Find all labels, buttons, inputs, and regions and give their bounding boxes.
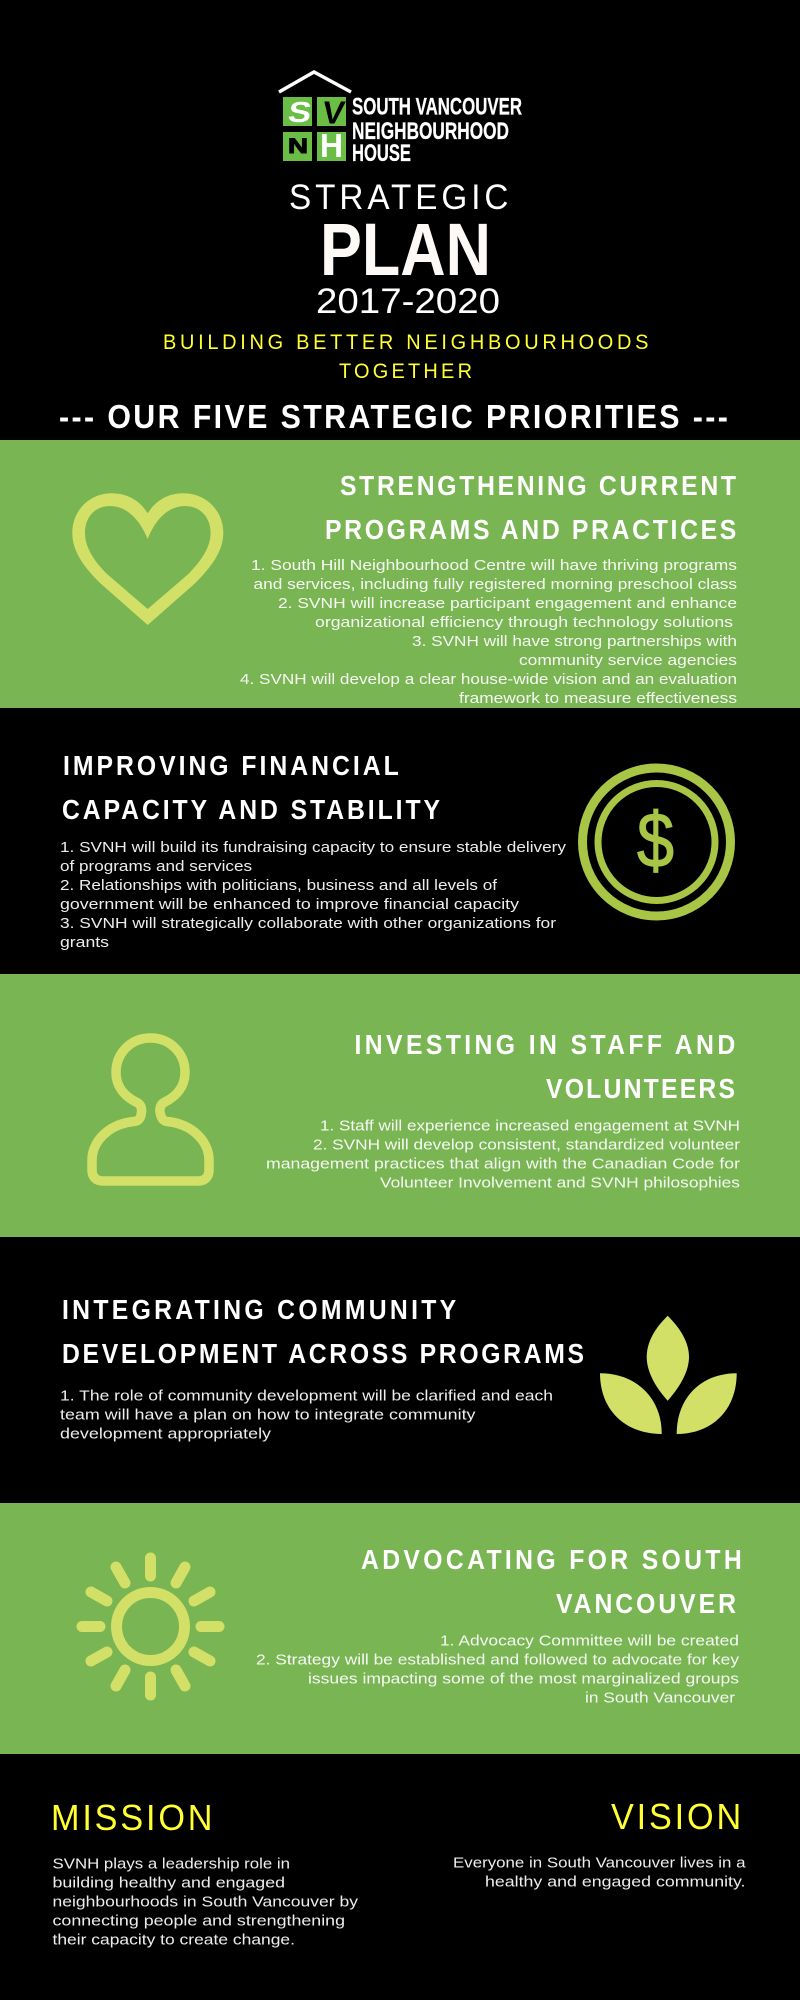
logo: South Vancouver Neighbourhood House: H — [320, 127, 343, 164]
header — [59, 72, 728, 435]
body text: of programs and services — [60, 858, 252, 875]
icon: person — [92, 1038, 209, 1181]
body text: 1. Advocacy Committee will be created — [440, 1633, 739, 1650]
heading: VOLUNTEERS — [546, 1073, 735, 1104]
body text — [60, 1388, 553, 1443]
heading — [62, 750, 441, 825]
section heading: five strategic priorities: --- OUR FIVE STRATEGIC PRIORITIES --- — [59, 398, 728, 435]
panel: vision — [453, 1797, 746, 1891]
icon: leaves — [600, 1316, 737, 1434]
body text: Volunteer Involvement and SVNH philosophies — [380, 1175, 740, 1192]
body text: government will be enhanced to improve financial capacity — [60, 896, 520, 913]
logo: South Vancouver Neighbourhood House: NEIGHBOURHOOD — [352, 118, 509, 145]
logo: South Vancouver Neighbourhood House — [279, 72, 522, 167]
heading: vision: VISION — [611, 1797, 741, 1837]
body text: vision: healthy and engaged community. — [485, 1874, 746, 1891]
panel: improving financial capacity — [0, 708, 800, 974]
body text: organizational efficiency through technology solutions — [315, 614, 733, 631]
body text: management practices that align with the Canadian Code for — [266, 1156, 740, 1173]
icon: dollar coin — [582, 768, 730, 916]
body text: mission: SVNH plays a leadership role in — [52, 1856, 290, 1873]
body text: 2. SVNH will increase participant engagement and enhance — [278, 595, 737, 612]
body text — [60, 839, 567, 951]
body text: 2. Strategy will be established and followed to advocate for key — [256, 1652, 740, 1669]
body text: development appropriately — [60, 1426, 272, 1443]
tagline — [163, 331, 648, 383]
heading: VANCOUVER — [556, 1588, 736, 1619]
body text: 1. SVNH will build its fundraising capacity to ensure stable delivery — [60, 839, 567, 856]
logo: South Vancouver Neighbourhood House: HOUSE — [352, 140, 411, 167]
tagline: BUILDING BETTER NEIGHBOURHOODS — [163, 331, 648, 354]
heading: PROGRAMS AND PRACTICES — [325, 514, 736, 545]
panel: integrating community development — [0, 1237, 800, 1503]
body text: 1. The role of community development will be clarified and each — [60, 1388, 553, 1405]
body text: 4. SVNH will develop a clear house-wide vision and an evaluation — [240, 671, 737, 688]
body text: 3. SVNH will have strong partnerships with — [412, 633, 737, 650]
body text: grants — [60, 934, 109, 951]
body text: community service agencies — [519, 652, 737, 669]
body text: team will have a plan on how to integrate community — [60, 1407, 476, 1424]
panel: advocating for south vancouver — [0, 1503, 800, 1754]
body text: 1. South Hill Neighbourhood Centre will have thriving programs — [251, 557, 737, 574]
icon: heart — [72, 493, 223, 625]
tagline: TOGETHER — [339, 360, 472, 383]
logo: South Vancouver Neighbourhood House: S — [286, 97, 313, 129]
body text: 2. Relationships with politicians, business and all levels of — [60, 877, 498, 894]
logo: South Vancouver Neighbourhood House: V — [320, 95, 348, 130]
body text — [266, 1118, 740, 1192]
body text: in South Vancouver — [585, 1690, 735, 1707]
heading — [361, 1544, 742, 1619]
heading: CAPACITY AND STABILITY — [62, 794, 441, 825]
body text: mission: building healthy and engaged — [52, 1875, 285, 1892]
icon: sun — [82, 1558, 219, 1695]
body text: mission: connecting people and strengthening — [52, 1913, 345, 1930]
title: strategic: STRATEGIC — [289, 178, 508, 217]
body text: framework to measure effectiveness — [459, 690, 737, 707]
body text: and services, including fully registered morning preschool class — [254, 576, 737, 593]
heading: INVESTING IN STAFF AND — [354, 1029, 735, 1060]
heading: mission: MISSION — [51, 1798, 213, 1838]
heading — [325, 470, 736, 545]
panel: investing in staff and volunteers — [0, 974, 800, 1237]
heading — [354, 1029, 735, 1104]
heading: INTEGRATING COMMUNITY — [62, 1294, 457, 1325]
body text — [256, 1633, 740, 1707]
panel: strengthening current programs — [0, 440, 800, 708]
heading: IMPROVING FINANCIAL — [63, 750, 399, 781]
title: years: 2017-2020 — [316, 282, 500, 321]
body text: 3. SVNH will strategically collaborate with other organizations for — [60, 915, 556, 932]
body text: 2. SVNH will develop consistent, standardized volunteer — [313, 1137, 740, 1154]
title: plan: PLAN — [320, 208, 491, 291]
body text: 1. Staff will experience increased engagement at SVNH — [320, 1118, 740, 1135]
icon: dollar coin: $ — [637, 796, 674, 884]
body text: mission: neighbourhoods in South Vancouver by — [52, 1894, 359, 1911]
body text: mission — [52, 1856, 359, 1949]
body text: vision — [453, 1855, 746, 1891]
logo: South Vancouver Neighbourhood House: N — [288, 135, 308, 158]
heading: STRENGTHENING CURRENT — [340, 470, 736, 501]
heading: DEVELOPMENT ACROSS PROGRAMS — [62, 1338, 584, 1369]
body text: vision: Everyone in South Vancouver lives in a — [453, 1855, 746, 1872]
body text: issues impacting some of the most marginalized groups — [308, 1671, 739, 1688]
logo: South Vancouver Neighbourhood House: SOUTH VANCOUVER — [352, 94, 522, 120]
panel: mission — [51, 1798, 359, 1949]
heading: ADVOCATING FOR SOUTH — [361, 1544, 742, 1575]
body text: mission: their capacity to create change. — [52, 1932, 295, 1949]
heading — [62, 1294, 584, 1369]
body text — [240, 557, 737, 707]
